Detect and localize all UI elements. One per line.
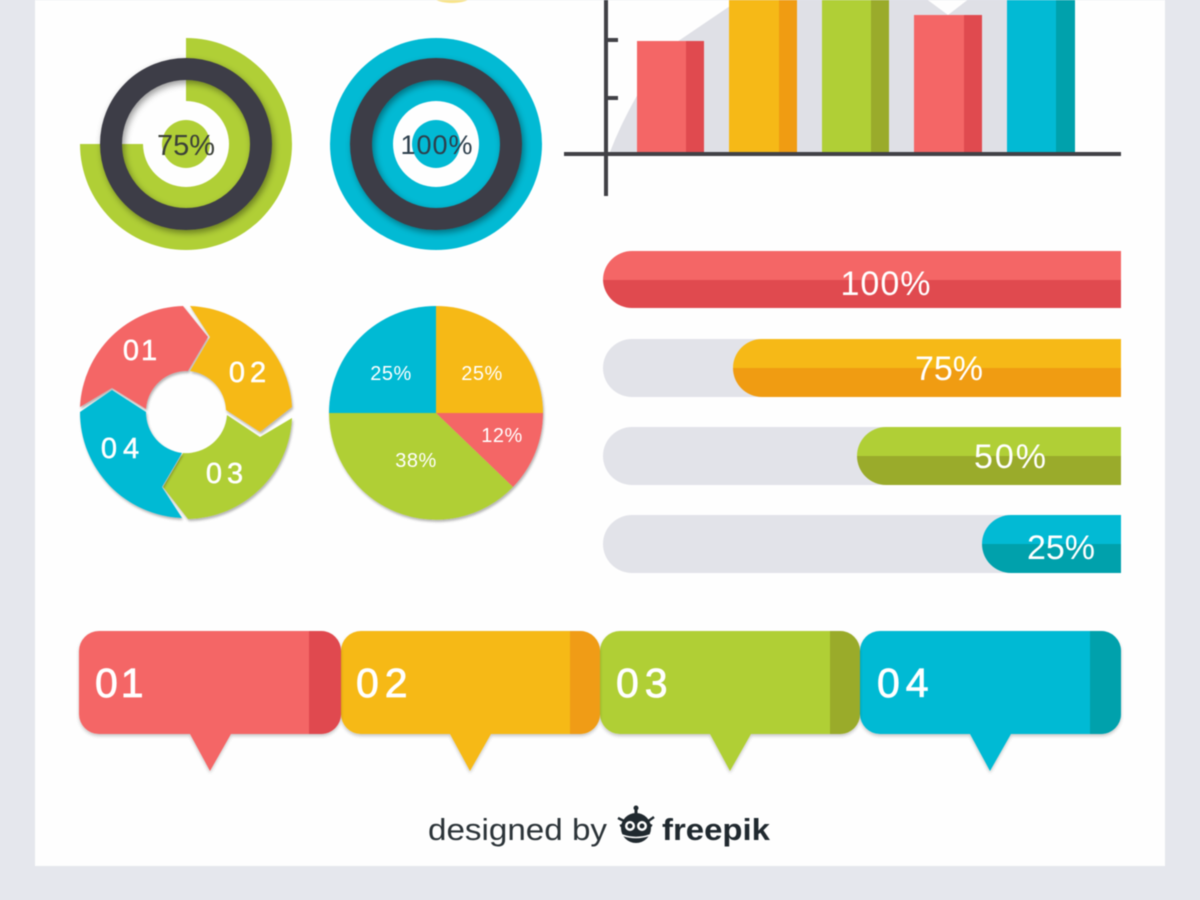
arrow 03 <box>163 415 292 519</box>
pie labels <box>370 363 523 472</box>
slice: green 38% <box>329 413 513 520</box>
bar chart <box>564 0 1121 196</box>
speech bubble 04 <box>860 631 1121 771</box>
label: 75%: 75% <box>157 130 215 162</box>
slice: blue 25% <box>329 306 436 413</box>
pie chart <box>329 306 543 520</box>
progress bar: 75% <box>603 339 1121 397</box>
progress bar: 50%: 50% <box>974 438 1048 476</box>
arrow 04 <box>80 390 182 518</box>
yellow fragment at top edge <box>434 0 470 3</box>
icon: freepik logo <box>618 806 654 843</box>
arrow 01: 01 <box>123 335 159 367</box>
progress bar: 25% <box>603 515 1121 573</box>
donut gauge: 75% <box>80 38 292 250</box>
speech bubble 03: 03 <box>616 660 674 706</box>
speech bubble 01 <box>79 631 341 771</box>
bar 2 orange <box>729 0 797 153</box>
progress bar: 50% <box>603 427 1121 485</box>
speech bubble 03 <box>600 631 860 771</box>
cycle diagram with four arrows <box>80 306 292 519</box>
arrow 03: 03 <box>206 458 248 490</box>
pie labels: 25% <box>461 363 503 385</box>
speech bubble 02 <box>341 631 600 771</box>
progress bar: 25%: 25% <box>1027 529 1095 567</box>
pie labels: 38% <box>395 450 437 472</box>
progress bar: 100%: 100% <box>841 265 931 303</box>
arrow 02: 02 <box>229 357 271 389</box>
pie labels: 12% <box>481 425 523 447</box>
label: 100%: 100% <box>400 130 474 160</box>
footer credit <box>428 806 771 847</box>
bar 1 red <box>637 41 704 153</box>
speech bubble 02: 02 <box>356 660 414 706</box>
pie labels: 25% <box>370 363 412 385</box>
arrow 01 <box>80 306 208 409</box>
speech bubble 04: 04 <box>877 660 935 706</box>
slice: red 12% <box>436 413 543 487</box>
arrow 02 <box>190 306 292 432</box>
text: designed by: designed by <box>428 812 608 847</box>
progress bar: 100% <box>603 251 1121 308</box>
bar 3 green <box>822 0 889 153</box>
bar 4 red <box>914 15 982 153</box>
chart axes <box>564 0 1121 196</box>
arrow 04: 04 <box>101 433 145 465</box>
slice: orange 25% <box>436 306 543 413</box>
bar 5 blue <box>1007 0 1075 153</box>
speech bubble 01: 01 <box>95 660 147 706</box>
progress bar: 75%: 75% <box>915 350 983 388</box>
text: freepik: freepik <box>662 812 771 847</box>
chart background area <box>610 0 1075 152</box>
donut gauge: 100% <box>330 38 542 250</box>
